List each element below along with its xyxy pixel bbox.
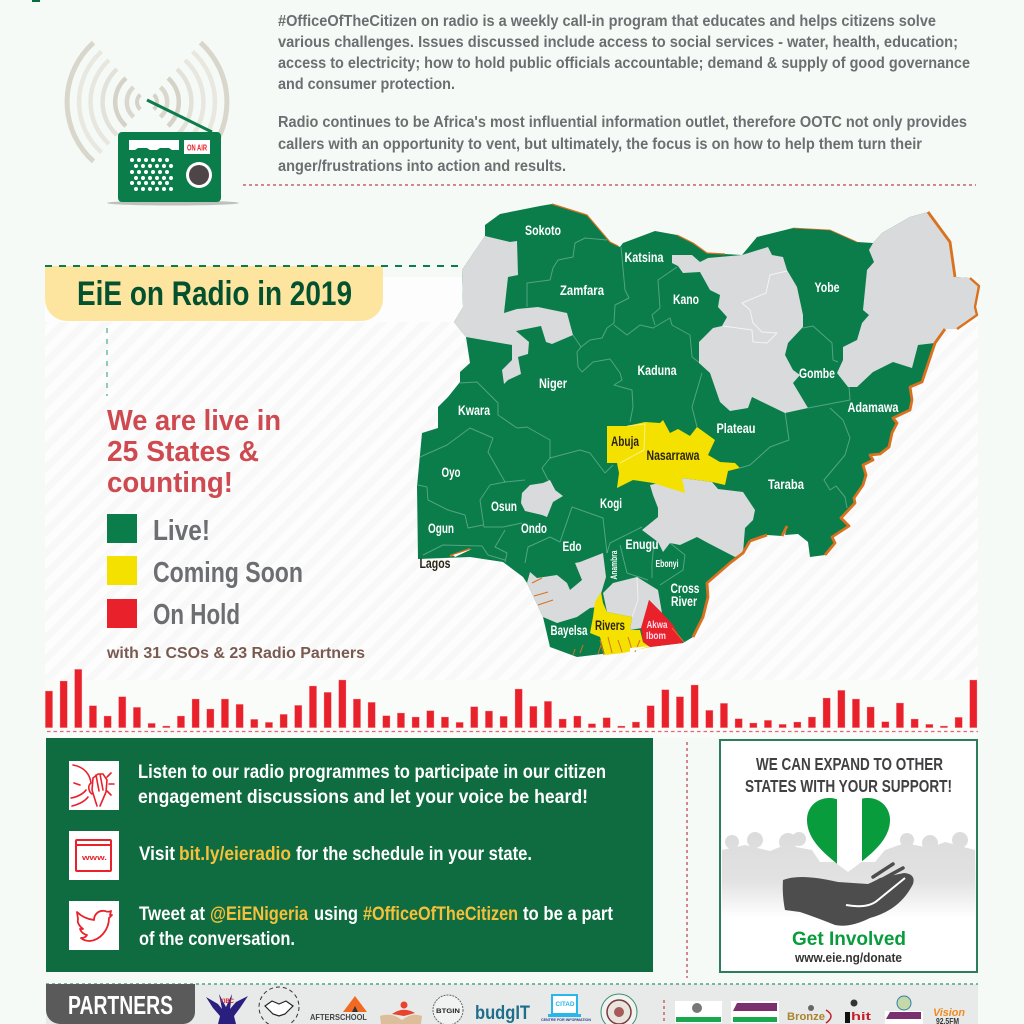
state labels: Yobe bbox=[814, 280, 840, 295]
state labels: Katsina bbox=[624, 250, 664, 265]
logo: open book bbox=[380, 1002, 422, 1024]
state labels: Ibom bbox=[646, 630, 666, 642]
icon: web browser bbox=[69, 831, 119, 880]
legend bbox=[107, 514, 303, 631]
yellow states: Abuja and Nasarrawa bbox=[607, 420, 740, 493]
logo: Hit FM bbox=[845, 1000, 871, 1023]
logo: radio station 1 bbox=[731, 1001, 779, 1023]
map: Nigeria states by status: Rivers bbox=[595, 618, 625, 633]
logo: handshake bbox=[259, 987, 299, 1024]
heading: partners: PARTNERS bbox=[68, 990, 173, 1020]
text block: programme description: anger/frustrations into action and results. bbox=[278, 158, 566, 175]
state labels: Cross bbox=[670, 581, 700, 596]
state labels: River bbox=[671, 594, 698, 609]
instruction: tweet: #OfficeOfTheCitizen bbox=[363, 903, 518, 925]
instruction: visit: bit.ly/eieradio bbox=[179, 843, 291, 865]
legend: Coming Soon bbox=[153, 557, 303, 589]
callout: live in 25 states: counting! bbox=[107, 467, 233, 499]
icon: Nigerian flag heart bbox=[805, 796, 892, 874]
logo: green seal bbox=[601, 994, 637, 1024]
instruction: tweet: of the conversation. bbox=[139, 928, 295, 950]
instruction: visit: Visit bbox=[139, 843, 175, 865]
state labels: Edo bbox=[562, 539, 582, 554]
state labels: Kwara bbox=[458, 403, 490, 418]
instruction: listen: engagement discussions and let your voice be heard! bbox=[138, 786, 588, 808]
map: Nigeria states by status: Abuja bbox=[611, 434, 639, 449]
heading tab: EiE on Radio in 2019: EiE on Radio in 2019 bbox=[77, 275, 352, 313]
partners strip bbox=[46, 984, 978, 1024]
state labels: Ondo bbox=[521, 521, 547, 536]
text block: programme description: access to electricity; how to hold public officials accountable; demand & supply of good governance bbox=[278, 55, 970, 72]
heading: expand support: STATES WITH YOUR SUPPORT! bbox=[745, 776, 952, 796]
heading: expand support: WE CAN EXPAND TO OTHER bbox=[756, 754, 943, 774]
gray states bbox=[454, 212, 979, 630]
state labels: Niger bbox=[539, 376, 568, 391]
heading: expand support bbox=[745, 754, 952, 796]
state borders bbox=[418, 238, 850, 617]
logo: CITAD bbox=[541, 995, 591, 1022]
instruction: visit: for the schedule in your state. bbox=[296, 843, 532, 865]
text: partners count: with 31 CSOs & 23 Radio Partners bbox=[106, 645, 365, 662]
callout: live in 25 states: 25 States & bbox=[107, 436, 259, 468]
logo: CITAD: CITAD bbox=[556, 1001, 575, 1008]
state labels: Kogi bbox=[600, 496, 622, 511]
state labels: Zamfara bbox=[560, 283, 604, 298]
logo: BTGIN bbox=[433, 995, 463, 1024]
text block: programme description bbox=[278, 13, 970, 175]
state labels: Adamawa bbox=[848, 400, 899, 415]
icon: web browser: www. bbox=[81, 855, 107, 862]
icon: open hand bbox=[783, 864, 914, 926]
heading: partners bbox=[46, 984, 195, 1024]
map: Nigeria states by status bbox=[417, 204, 979, 657]
instruction: tweet: to be a part bbox=[523, 903, 613, 925]
instruction: tweet: using bbox=[314, 903, 358, 925]
legend: Live! bbox=[153, 515, 210, 547]
yellow state: Rivers bbox=[590, 592, 650, 655]
state labels: Anambra bbox=[609, 550, 619, 580]
logo: radio station 2 bbox=[885, 996, 923, 1024]
state labels: Bayelsa bbox=[550, 623, 588, 638]
logo: Gombe Media Corporation bbox=[675, 1001, 722, 1023]
logo: BTGIN: BTGIN bbox=[436, 1008, 460, 1015]
state labels: Oyo bbox=[442, 465, 460, 480]
state labels: Kaduna bbox=[638, 363, 677, 378]
logo: Hit FM: hit bbox=[851, 1011, 871, 1023]
text: get involved: Get Involved bbox=[792, 929, 906, 950]
map: Nigeria states by status: Lagos bbox=[420, 556, 450, 571]
state labels: Osun bbox=[491, 499, 517, 514]
text block: programme description: various challenges. Issues discussed include access to social services - water, health, education; bbox=[278, 34, 958, 51]
state labels: Enugu bbox=[626, 537, 658, 552]
crowd silhouette bbox=[722, 832, 976, 918]
logo: Afterschool bbox=[310, 996, 367, 1022]
callout: live in 25 states: We are live in bbox=[107, 405, 281, 437]
state labels: Ogun bbox=[428, 521, 454, 536]
logo: CITAD: CENTRE FOR INFORMATION bbox=[541, 1018, 591, 1022]
state labels: Sokoto bbox=[525, 223, 561, 238]
text block: programme description: Radio continues to be Africa's most influential information outlet, therefore OOTC not only provides bbox=[278, 114, 967, 131]
panel: get involved donate bbox=[720, 740, 977, 972]
state labels: Gombe bbox=[799, 366, 835, 381]
icon: radio on air: ON AIR bbox=[187, 142, 207, 152]
logo: Vision FM: Vision bbox=[933, 1007, 965, 1019]
bar chart: decorative audio bars bbox=[45, 669, 977, 728]
text block: programme description: #OfficeOfTheCitizen on radio is a weekly call-in program that educates and helps citizens solve bbox=[278, 13, 936, 30]
state labels: Ebonyi bbox=[656, 559, 679, 570]
callout: live in 25 states bbox=[107, 405, 281, 499]
text block: programme description: callers with an opportunity to vent, but ultimately, the focus is on how to help them turn their bbox=[278, 136, 922, 153]
text: donate url: www.eie.ng/donate bbox=[794, 951, 902, 965]
logo: YIBC: YIBC bbox=[220, 999, 235, 1005]
state labels bbox=[428, 223, 899, 642]
map: Nigeria states by status: Nasarrawa bbox=[646, 448, 700, 463]
state labels: Akwa bbox=[646, 619, 668, 631]
icon: listening ear bbox=[69, 761, 119, 810]
instruction: tweet: Tweet at bbox=[139, 903, 205, 925]
orange border and creeks bbox=[450, 204, 979, 655]
icon: twitter bird bbox=[69, 901, 119, 950]
state labels: Plateau bbox=[716, 421, 756, 436]
logo: Bronze FM: Bronze bbox=[787, 1011, 825, 1023]
instruction: tweet bbox=[139, 903, 613, 950]
icon: radio on air bbox=[67, 43, 239, 205]
instruction: listen: Listen to our radio programmes to participate in our citizen bbox=[138, 761, 606, 783]
panel: how to participate bbox=[46, 738, 653, 972]
state labels: Taraba bbox=[768, 477, 804, 492]
logo: budgIT: budgIT bbox=[475, 1003, 530, 1024]
instruction: listen bbox=[138, 761, 606, 808]
text block: programme description: and consumer protection. bbox=[278, 76, 455, 93]
logo: YIBC bbox=[206, 994, 248, 1024]
logo: Afterschool: AFTERSCHOOL bbox=[310, 1012, 367, 1022]
state labels: Kano bbox=[673, 292, 699, 307]
red state: Akwa Ibom bbox=[641, 600, 683, 647]
legend: On Hold bbox=[153, 599, 240, 631]
instruction: tweet: @EiENigeria bbox=[210, 903, 308, 925]
logo: Bronze FM bbox=[787, 1005, 831, 1023]
instruction: visit bbox=[139, 843, 532, 865]
heading tab: EiE on Radio in 2019 bbox=[45, 266, 465, 321]
